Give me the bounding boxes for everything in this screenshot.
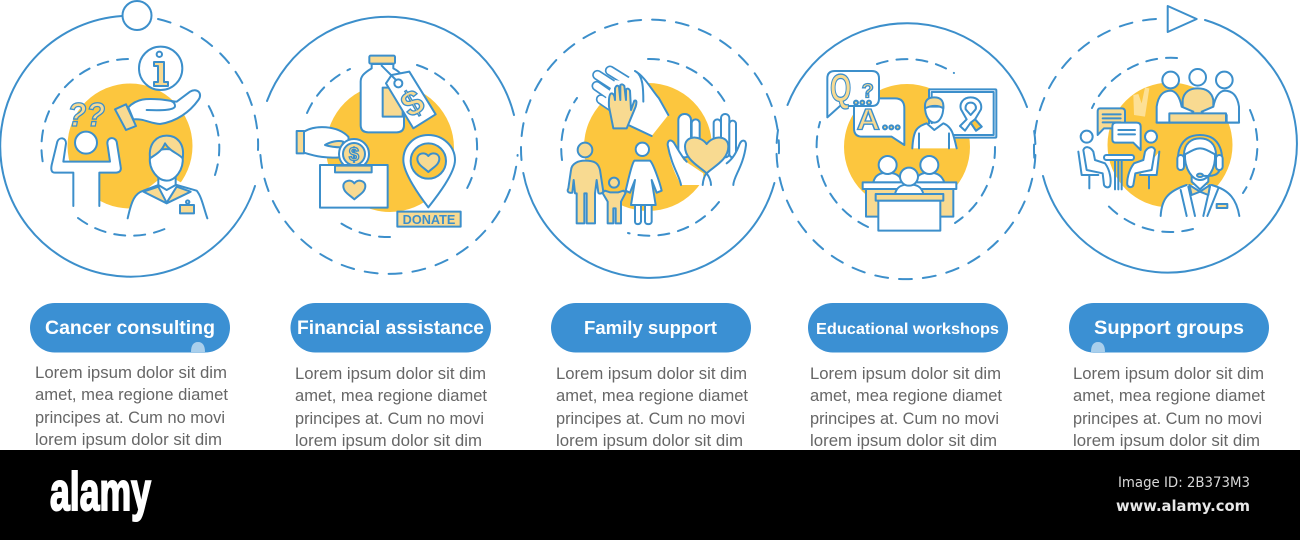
footer bar: [0, 450, 1300, 540]
icon: info circle: [139, 47, 182, 90]
inner dashed ring: [1092, 58, 1257, 232]
panel: educational workshops: [776, 23, 1036, 279]
text: support groups body: amet, mea regione diamet: [1073, 387, 1265, 405]
icon: presenter: [912, 97, 957, 148]
icon: play triangle: [1168, 6, 1197, 32]
pill: family support: Family support: [584, 317, 717, 338]
yellow circle: [326, 84, 454, 212]
text: family support body: [556, 365, 748, 450]
outer ring: [260, 17, 518, 274]
icon: price tag: $: [395, 82, 431, 125]
pill: support groups: [1069, 303, 1269, 352]
icon: hand with coin: [297, 127, 369, 169]
icon: family: [568, 71, 746, 224]
icon: mother: [626, 143, 662, 224]
icon: presentation screen: [929, 89, 996, 138]
text: family support body: Lorem ipsum dolor sit dim: [556, 365, 747, 383]
text: website: www.alamy.com: [1116, 497, 1250, 515]
icon: confused person: ??: [68, 97, 105, 134]
icon: hands holding heart: [668, 114, 746, 185]
text: family support body: amet, mea regione diamet: [556, 387, 748, 405]
icon: question bubble: [827, 67, 879, 117]
icon: question bubble: ?: [862, 80, 874, 102]
icon: groups: [1078, 69, 1239, 216]
text: educational workshops body: lorem ipsum dolor sit dim: [810, 432, 997, 450]
text: cancer consulting body: lorem ipsum dolor sit dim: [35, 431, 222, 449]
icon: question bubble: Q: [830, 67, 851, 111]
text: family support body: principes at. Cum no movi: [556, 410, 745, 428]
yellow circle: [1108, 82, 1232, 208]
text: educational workshops body: Lorem ipsum dolor sit dim: [810, 365, 1001, 383]
text: cancer consulting body: amet, mea regione diamet: [35, 386, 228, 404]
inner dashed ring: [41, 59, 219, 236]
yellow circle: [584, 83, 712, 211]
icon: consulting: [51, 47, 207, 218]
outer ring: [1034, 19, 1297, 273]
icon: meeting group: [1157, 69, 1239, 123]
icon: father: [568, 143, 603, 223]
text: support groups body: Lorem ipsum dolor sit dim: [1073, 365, 1264, 383]
icon: call center agent: [1161, 135, 1239, 216]
icon: big and small hand: [597, 71, 668, 136]
yellow circle: [68, 84, 192, 208]
pill: cancer consulting: [30, 303, 230, 352]
text: support groups body: principes at. Cum no movi: [1073, 410, 1262, 428]
icon: workshop: [827, 67, 996, 231]
logo: alamy: alamy: [50, 462, 151, 522]
icon: donation: [297, 56, 461, 227]
text: educational workshops body: amet, mea regione diamet: [810, 387, 1002, 405]
text: financial assistance body: principes at. Cum no movi: [295, 410, 484, 428]
panel: family support: [521, 20, 779, 278]
icon: helping hand: [115, 90, 200, 130]
panel: support groups: [1034, 6, 1297, 273]
text: financial assistance body: Lorem ipsum dolor sit dim: [295, 365, 486, 383]
outer ring: [776, 23, 1036, 279]
text: support groups body: [1073, 365, 1265, 450]
icon: location pin: [403, 135, 455, 207]
icon: donation box: [320, 165, 388, 208]
panel: cancer consulting: [0, 1, 258, 277]
text: financial assistance body: amet, mea regione diamet: [295, 387, 487, 405]
text: financial assistance body: [295, 365, 487, 450]
pill: educational workshops: [808, 303, 1008, 352]
text: educational workshops body: principes at. Cum no movi: [810, 410, 999, 428]
pill: financial assistance: [290, 303, 491, 352]
icon: donate sign: DONATE: [403, 213, 455, 227]
icon: people at table: [1078, 131, 1159, 189]
inner dashed ring: [307, 65, 477, 237]
icon: confused person: [51, 97, 121, 206]
icon: hand with coin: $: [349, 144, 359, 165]
text: cancer consulting body: Lorem ipsum dolor sit dim: [35, 364, 227, 382]
pill: support groups: Support groups: [1094, 317, 1244, 339]
icon: students at desks: [863, 156, 956, 231]
pill: cancer consulting: Cancer consulting: [45, 317, 215, 339]
icon: child: [602, 178, 626, 223]
pill: financial assistance: Financial assistance: [297, 317, 484, 339]
text: image id: Image ID: 2B373M3: [1118, 475, 1250, 491]
text: support groups body: lorem ipsum dolor sit dim: [1073, 432, 1260, 450]
icon: chat bubbles: [1098, 108, 1141, 150]
pill: educational workshops: Educational workshops: [816, 321, 999, 338]
text: cancer consulting body: principes at. Cum no movi: [35, 409, 225, 427]
inner dashed ring: [817, 59, 995, 227]
icon: nurse: [128, 136, 207, 218]
text: educational workshops body: [810, 365, 1002, 450]
pill: family support: [551, 303, 751, 352]
inner dashed ring: [561, 59, 725, 236]
icon: price tag: [382, 66, 436, 128]
yellow circle: [844, 84, 970, 210]
text: family support body: lorem ipsum dolor sit dim: [556, 432, 743, 450]
panel: financial assistance: [260, 17, 518, 274]
text: cancer consulting body: [35, 364, 228, 449]
outer ring: [521, 20, 779, 278]
icon: medicine bottle: [361, 56, 404, 132]
outer ring: [0, 1, 258, 277]
icon: answer bubble: A: [857, 103, 880, 136]
text: financial assistance body: lorem ipsum dolor sit dim: [295, 432, 482, 450]
icon: answer bubble: [854, 98, 904, 145]
